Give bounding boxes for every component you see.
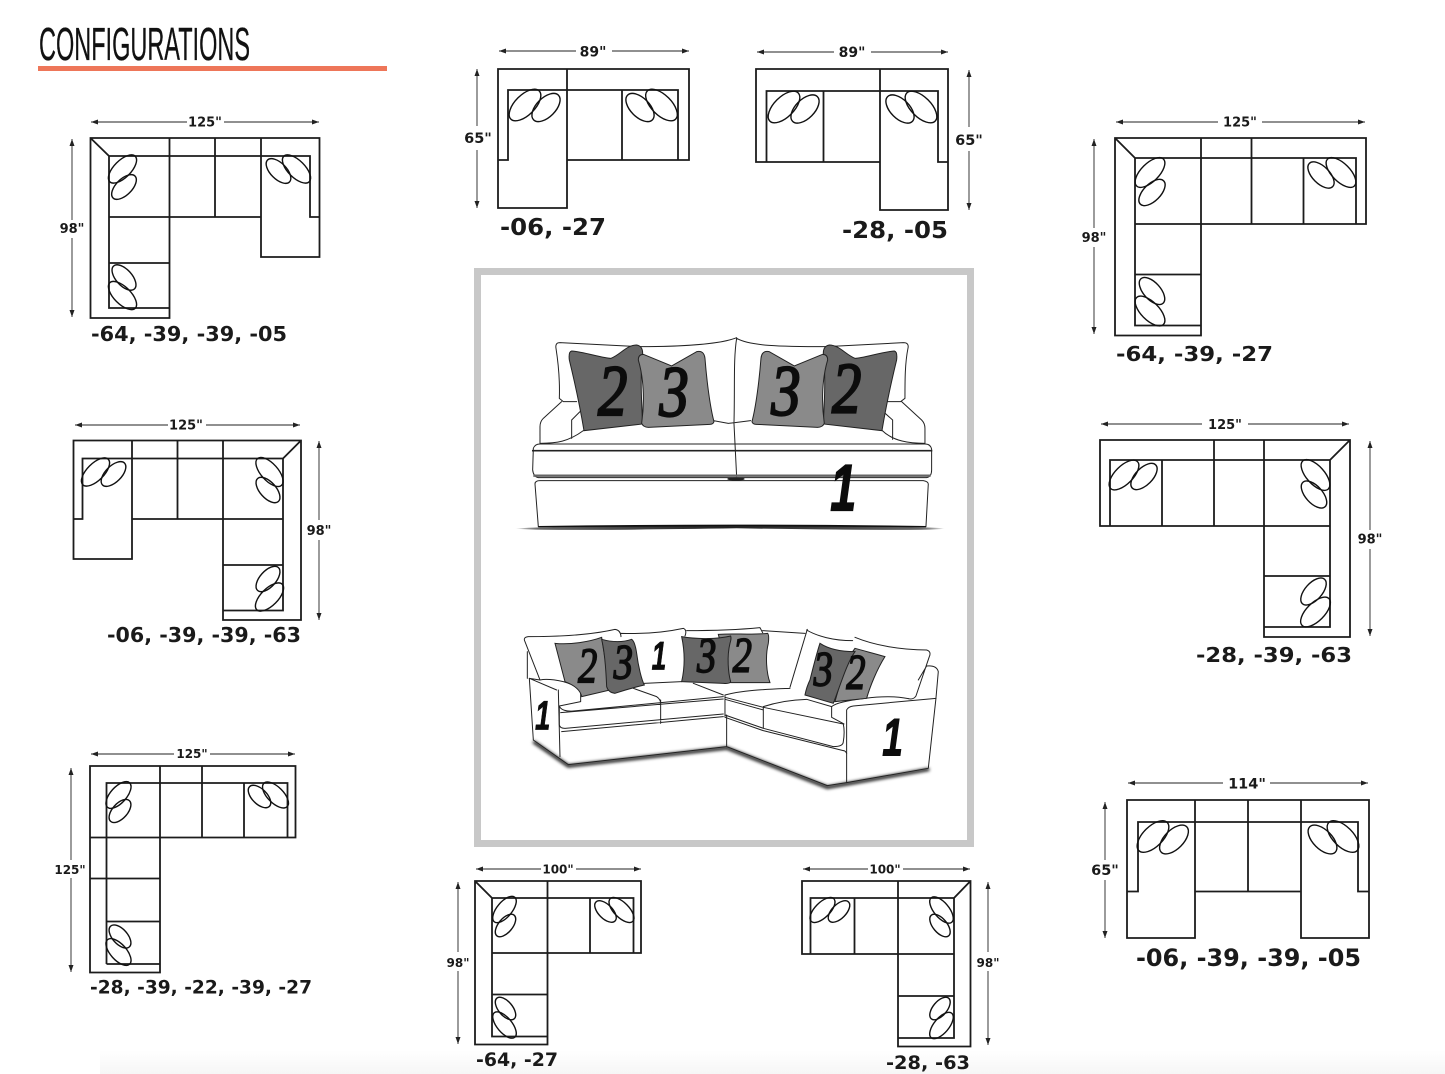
sectional illustration [524,626,938,787]
width dimension: 89" [839,45,865,61]
pillow numbers: 2 [846,644,866,700]
outline [1100,440,1350,637]
diagram: -06, -39, -39, -63 [74,418,331,647]
pillows [504,84,683,127]
left arm [529,678,581,706]
pillows [102,777,293,970]
depth dimension: 65" [464,131,492,147]
code: -64, -27 [476,1049,558,1071]
outline [1127,800,1369,938]
pillow numbers: 2 [578,637,597,693]
pillow numbers [598,350,861,525]
depth dimension: 125" [54,863,86,877]
depth dimension: 98" [1082,231,1106,246]
depth dimension: 65" [955,133,983,149]
pillows [104,150,315,314]
width dimension: 125" [1223,116,1257,130]
code: -28, -05 [842,216,948,244]
depth dimension: 98" [1358,532,1382,548]
pillow numbers: 1 [652,634,666,678]
outline [756,69,948,210]
depth dimension [464,69,492,208]
code: -64, -39, -39, -05 [91,322,287,346]
code: -64, -39, -27 [1116,342,1273,366]
seat cushions [533,444,932,478]
outline [90,138,320,318]
outline [90,766,296,972]
width dimension: 114" [1228,776,1266,792]
pillow numbers: 2 [733,626,752,682]
code: -28, -63 [886,1052,970,1074]
body outline [529,678,936,786]
pillows [806,893,958,1043]
floor shadow [533,742,929,787]
pillow numbers: 3 [770,352,801,431]
diagram: -28, -63 [802,862,999,1074]
left pillows [569,345,714,431]
depth dimension [955,70,983,210]
pillows [1130,153,1361,331]
diagram: -28, -39, -22, -39, -27 [54,747,312,998]
depth dimension: 98" [60,222,84,237]
sofa illustration [515,338,945,530]
diagram: -64, -39, -27 [1082,116,1366,366]
depth dimension: 65" [1091,863,1119,879]
code: -06, -27 [500,213,606,241]
pillow numbers: 3 [613,634,633,690]
diagram: -64, -39, -39, -05 [60,116,320,346]
diagram: -28, -39, -63 [1100,418,1382,667]
width dimension: 125" [188,116,222,130]
width dimension: 89" [580,44,606,60]
pillows [488,892,638,1042]
sofa back and arms [540,338,925,477]
pillows [1104,455,1335,632]
width dimension: 125" [169,418,203,434]
code: -28, -39, -22, -39, -27 [90,978,312,998]
pillow numbers: 3 [696,627,716,683]
outline [498,69,689,208]
right arm [832,698,936,783]
code: -28, -39, -63 [1196,643,1352,667]
code: -06, -39, -39, -63 [107,623,301,647]
outline [475,881,641,1044]
width dimension: 125" [1208,418,1242,433]
center panel frame [478,272,970,844]
pillow numbers: 1 [830,451,856,525]
depth dimension: 98" [447,956,469,970]
pillow numbers: 1 [535,692,550,738]
diagram: -06, -27 [464,44,689,241]
pillow numbers: 1 [882,708,903,767]
diagram: -06, -39, -39, -05 [1091,776,1369,972]
width dimension: 100" [542,862,574,876]
pillows [77,453,288,616]
pillow numbers: 3 [813,640,833,696]
pillow numbers: 2 [598,352,627,431]
code: -06, -39, -39, -05 [1136,944,1361,972]
depth dimension: 98" [977,956,999,970]
pillows [555,633,885,703]
title: CONFIGURATIONS [39,18,250,70]
pillows [763,86,942,128]
pillow numbers [535,626,903,767]
outline [74,440,301,620]
diagram: -28, -05 [756,45,983,244]
diagram: -64, -27 [447,862,641,1071]
right pillows [752,345,897,431]
pillows [1132,815,1364,859]
pillow numbers: 2 [832,350,861,429]
depth dimension: 98" [307,524,331,539]
back cushions [524,628,938,699]
width dimension: 125" [176,747,208,761]
seat cushions [559,682,908,751]
depth dimension [1091,802,1119,938]
sofa base [535,481,928,527]
outline [1115,138,1366,336]
outline [802,881,970,1046]
floor shadow [515,525,945,530]
width dimension: 100" [869,862,901,876]
pillow numbers: 3 [658,353,689,432]
